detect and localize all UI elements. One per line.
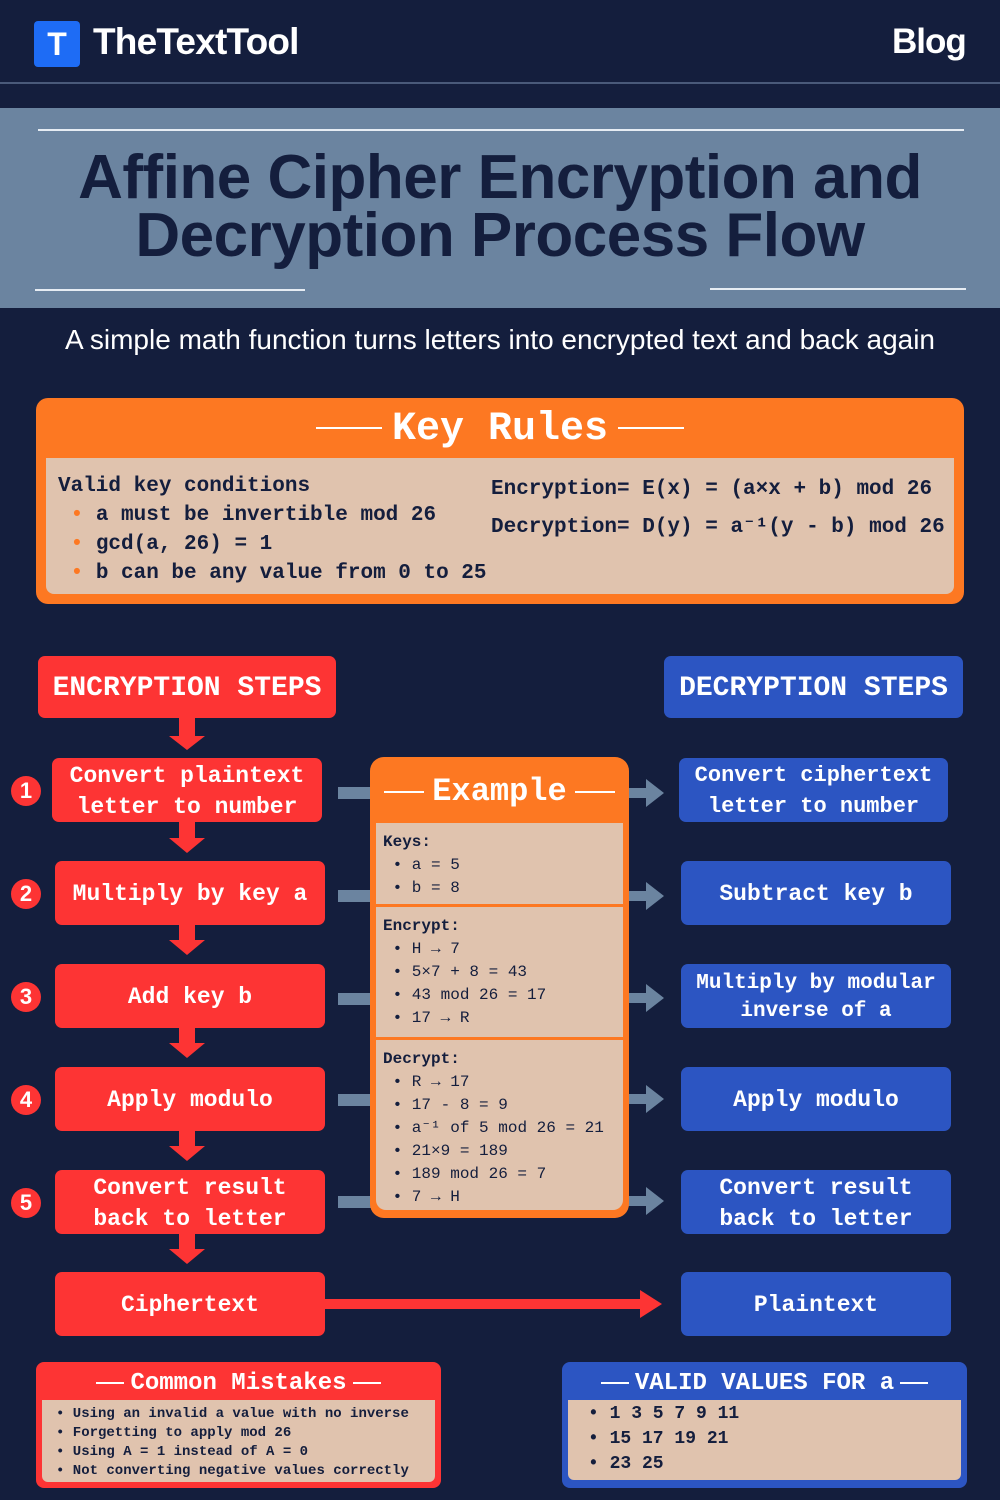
text: 4 [20,1087,32,1112]
valid values list [568,1400,961,1480]
text: 2 [20,881,32,906]
mistakes list: • Using an invalid a value with no inverse [56,1406,409,1422]
step numbers: 1 [20,778,32,803]
formulas: Decryption= D(y) = a⁻¹(y - b) mod 26 [491,516,945,539]
decryption steps heading [664,656,963,718]
decryption step 1 [679,758,948,822]
subtitle: A simple math function turns letters into encrypted text and back again [65,324,935,355]
decryption step 4: Apply modulo [733,1087,899,1113]
decryption step 5: back to letter [719,1206,913,1232]
encryption step 5 [55,1170,325,1234]
logo icon [34,21,80,67]
decrypt section: Decrypt: [383,1050,460,1068]
encrypt section [376,907,623,1037]
encryption step 3: Add key b [128,984,252,1010]
logo icon: T [47,26,67,62]
title: Decryption Process Flow [135,201,865,270]
encrypt section: • H → 7 [393,940,460,958]
decrypt section [376,1040,623,1210]
decryption step 2 [681,861,951,925]
encryption step 1: letter to number [77,794,297,820]
encrypt section: Encrypt: [383,917,460,935]
encryption step 5: back to letter [93,1206,287,1232]
encryption step 5: Convert result [93,1175,287,1201]
decryption step 1: letter to number [708,794,919,819]
plaintext: Plaintext [754,1292,878,1318]
decrypt section: • R → 17 [393,1073,469,1091]
decryption step 3: Multiply by modular [696,972,936,995]
decrypt section: • a⁻¹ of 5 mod 26 = 21 [393,1119,604,1137]
encryption step 1 [52,758,322,822]
mistakes heading: Common Mistakes [130,1370,347,1397]
mistakes list: • Not converting negative values correctly [56,1463,409,1479]
valid key conditions: • b can be any value from 0 to 25 [71,562,486,585]
encrypt section: • 43 mod 26 = 17 [393,986,546,1004]
keys section [376,823,623,904]
ciphertext [55,1272,325,1336]
encryption step 4 [55,1067,325,1131]
key rules body [46,458,954,594]
mistakes list [42,1400,435,1482]
valid values list: • 1 3 5 7 9 11 [588,1404,739,1424]
mistakes list: • Using A = 1 instead of A = 0 [56,1444,308,1460]
title: Affine Cipher Encryption and [78,143,922,212]
encrypt section: • 17 → R [393,1009,469,1027]
formulas [491,478,945,539]
valid key conditions: • gcd(a, 26) = 1 [71,533,272,556]
encryption step 4: Apply modulo [107,1087,273,1113]
example heading: Example [432,773,567,810]
keys section: • b = 8 [393,879,460,897]
panel: example [370,757,629,1218]
encryption step 2 [55,861,325,925]
mistakes list: • Forgetting to apply mod 26 [56,1425,291,1441]
valid values list: • 23 25 [588,1454,664,1474]
blog link: Blog [892,22,966,61]
key rules heading: Key Rules [392,407,608,452]
valid values heading: VALID VALUES FOR a [635,1370,894,1397]
encryption step 3 [55,964,325,1028]
ciphertext: Ciphertext [121,1292,259,1318]
plaintext [681,1272,951,1336]
decrypt section: • 189 mod 26 = 7 [393,1165,546,1183]
keys section: • a = 5 [393,856,460,874]
decryption steps heading: DECRYPTION STEPS [679,673,948,704]
decryption step 3: inverse of a [740,1000,892,1023]
decryption step 3 [681,964,951,1028]
text: 3 [20,984,32,1009]
decryption step 5: Convert result [719,1175,913,1201]
logo text: TheTextTool [93,21,299,62]
panel: valid values for a [562,1362,967,1488]
keys section: Keys: [383,833,431,851]
decrypt section: • 21×9 = 189 [393,1142,508,1160]
valid key conditions: Valid key conditions [58,475,310,498]
panel: common mistakes [36,1362,441,1488]
decrypt section: • 7 → H [393,1188,460,1206]
title band [0,108,1000,308]
header bar [0,0,1000,84]
valid key conditions: • a must be invertible mod 26 [71,504,436,527]
encryption steps heading: ENCRYPTION STEPS [53,673,321,704]
panel: key rules [36,398,964,604]
formulas: Encryption= E(x) = (a×x + b) mod 26 [491,478,932,501]
decryption step 4 [681,1067,951,1131]
encryption step 1: Convert plaintext [70,763,304,789]
encryption step 2: Multiply by key a [73,881,307,907]
decrypt section: • 17 - 8 = 9 [393,1096,508,1114]
valid values list: • 15 17 19 21 [588,1429,728,1449]
valid key conditions [58,475,486,585]
text: 5 [20,1190,32,1215]
title [78,143,922,270]
encrypt section: • 5×7 + 8 = 43 [393,963,527,981]
decryption step 1: Convert ciphertext [695,763,932,788]
decryption step 5 [681,1170,951,1234]
decryption step 2: Subtract key b [719,881,913,907]
step numbers [11,776,41,806]
encryption steps heading [38,656,336,718]
